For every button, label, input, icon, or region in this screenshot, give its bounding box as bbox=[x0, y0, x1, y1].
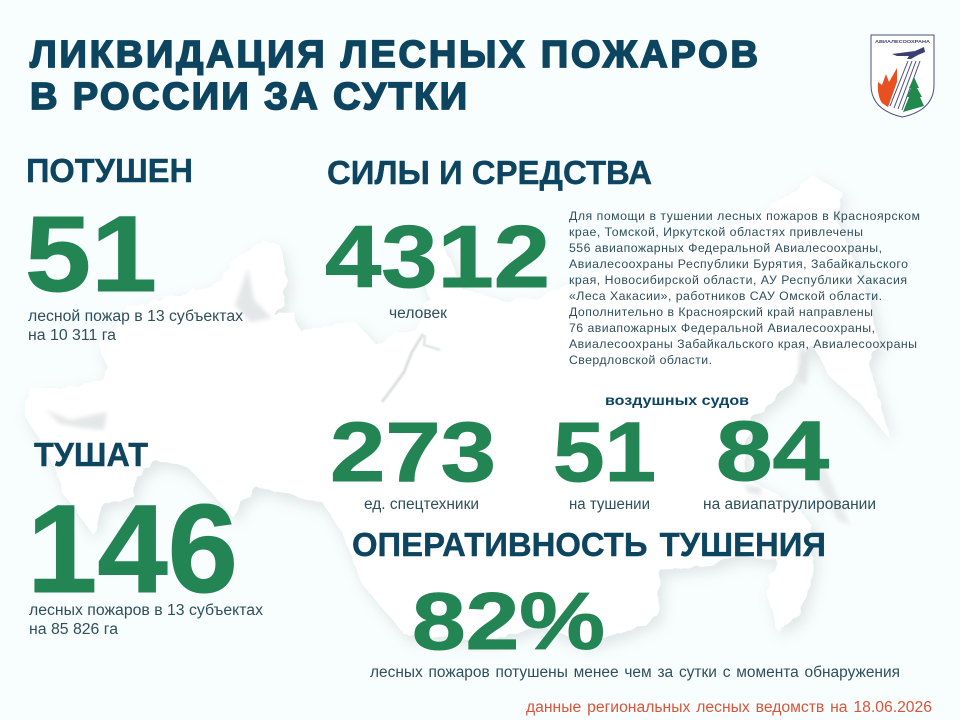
title bbox=[30, 34, 758, 118]
paragraph: personnel details: Авиалесоохраны Забайкальского края, Авиалесоохраны bbox=[569, 337, 917, 351]
title: ЛИКВИДАЦИЯ ЛЕСНЫХ ПОЖАРОВ bbox=[30, 34, 758, 76]
panel: response speed bbox=[352, 526, 900, 681]
heading: aircraft: воздушных судов bbox=[605, 392, 749, 408]
stat: aircraft extinguishing: на тушении bbox=[569, 496, 650, 513]
description: extinguished fires: лесной пожар в 13 субъектах bbox=[28, 308, 243, 325]
number: 146 fires: 146 bbox=[27, 480, 238, 619]
paragraph: personnel details: Свердловской области. bbox=[569, 353, 712, 367]
paragraph: personnel details: крае, Томской, Иркутской областях привлечены bbox=[569, 225, 863, 239]
paragraph: personnel details bbox=[569, 209, 920, 367]
panel: being extinguished bbox=[27, 436, 263, 638]
description: active fires: на 85 826 га bbox=[29, 621, 118, 638]
paragraph: personnel details: 556 авиапожарных Федеральной Авиалесоохраны, bbox=[569, 241, 882, 255]
description: response speed: лесных пожаров потушены менее чем за сутки с момента обнаружения bbox=[370, 664, 900, 681]
stat: aircraft patrol bbox=[703, 404, 876, 513]
panel: forces and means: СИЛЫ И СРЕДСТВА bbox=[327, 154, 652, 191]
label: people: человек bbox=[389, 305, 447, 322]
logo: Avialesookhrana shield: АВИАЛЕСООХРАНА bbox=[875, 39, 931, 44]
title: В РОССИИ ЗА СУТКИ bbox=[30, 76, 467, 118]
paragraph: personnel details: 76 авиапожарных Федеральной Авиалесоохраны, bbox=[569, 321, 875, 335]
description: active fires bbox=[29, 602, 263, 638]
logo: Avialesookhrana shield bbox=[871, 35, 934, 117]
stat: aircraft extinguishing: 51 bbox=[553, 405, 656, 499]
stat: aircraft patrol: на авиапатрулировании bbox=[703, 496, 876, 513]
number: 51 fires: 51 bbox=[25, 193, 157, 314]
paragraph: personnel details: Авиалесоохраны Республики Бурятия, Забайкальского bbox=[569, 257, 908, 271]
paragraph: personnel details: «Леса Хакасии», работников САУ Омской области. bbox=[569, 289, 882, 303]
paragraph: personnel details: Для помощи в тушении лесных пожаров в Красноярском bbox=[569, 209, 920, 223]
map of Russia bbox=[23, 176, 891, 650]
paragraph: personnel details: края, Новосибирской области, АУ Республики Хакасия bbox=[569, 273, 907, 287]
panel: being extinguished: ТУШАТ bbox=[34, 436, 148, 473]
panel: extinguished bbox=[25, 152, 243, 344]
paragraph: personnel details: Дополнительно в Красноярский край направлены bbox=[569, 305, 873, 319]
description: active fires: лесных пожаров в 13 субъектах bbox=[29, 602, 263, 619]
description: extinguished fires bbox=[28, 308, 243, 344]
panel: extinguished: ПОТУШЕН bbox=[26, 152, 193, 189]
number: 4312 people: 4312 bbox=[325, 207, 550, 306]
stat: aircraft patrol: 84 bbox=[716, 404, 829, 498]
stat: special equipment: ед. спецтехники bbox=[364, 496, 479, 513]
panel: forces and means bbox=[325, 154, 920, 367]
description: extinguished fires: на 10 311 га bbox=[28, 327, 116, 344]
number: 82 percent: 82% bbox=[412, 577, 605, 667]
panel: response speed: ОПЕРАТИВНОСТЬ ТУШЕНИЯ bbox=[352, 526, 826, 563]
stat: special equipment: 273 bbox=[330, 405, 496, 499]
source note: данные региональных лесных ведомств на 18.06.2026 bbox=[526, 699, 932, 716]
